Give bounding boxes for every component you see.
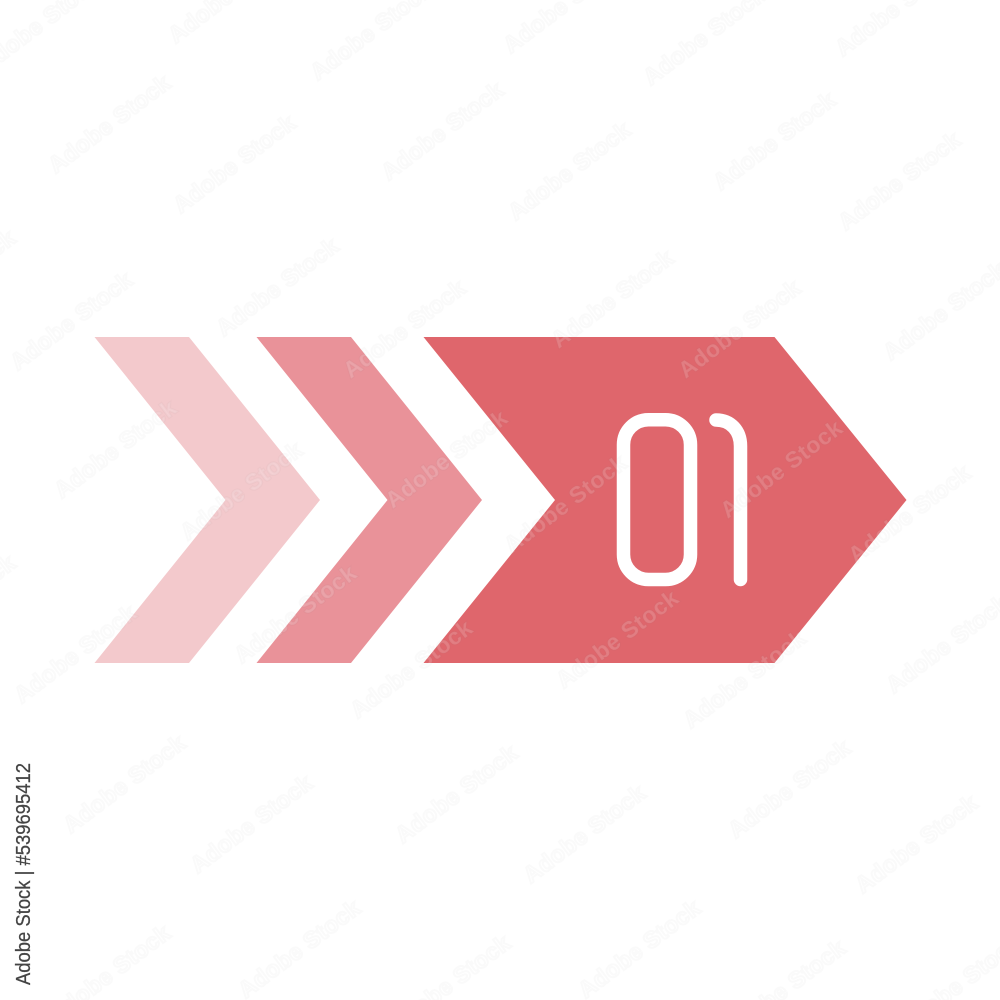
medium chevron [256,337,482,663]
watermark pattern: Adobe Stock [376,76,508,185]
watermark pattern: Adobe Stock [850,789,982,898]
watermark pattern: Adobe Stock [380,404,512,513]
watermark pattern: Adobe Stock [546,244,678,353]
watermark pattern: Adobe Stock [9,599,141,708]
watermark pattern: Adobe Stock [58,729,190,838]
watermark pattern: Adobe Stock [723,734,855,843]
watermark pattern: Adobe Stock [833,126,965,235]
watermark pattern: Adobe Stock [185,769,317,878]
main arrow [424,337,906,663]
watermark pattern: Adobe Stock [5,266,137,375]
stock ID caption: Adobe Stock | #539695412 [13,763,35,985]
watermark pattern: Adobe Stock [390,739,522,848]
watermark pattern: Adobe Stock [233,894,365,1000]
watermark pattern: Adobe Stock [499,449,631,558]
watermark pattern: Adobe Stock [843,459,975,568]
watermark pattern: Adobe Stock [175,436,307,545]
watermark pattern: Adobe Stock [345,614,477,723]
watermark pattern: Adobe Stock [338,274,470,383]
chevron arrow graphic [94,337,906,663]
watermark pattern: Adobe Stock [211,232,343,341]
watermark pattern: Adobe Stock [503,116,635,225]
watermark pattern: Adobe Stock [708,86,840,195]
watermark pattern: Adobe Stock [715,414,847,523]
watermark pattern: Adobe Stock [573,894,705,1000]
digit 1 [716,420,740,580]
digit 0 [624,420,690,580]
watermark pattern: Adobe Stock [49,394,181,503]
watermark pattern: Adobe Stock [229,559,361,668]
watermark pattern: Adobe Stock [168,109,300,218]
light chevron [94,337,320,663]
watermark pattern: Adobe Stock [673,274,805,383]
watermark pattern: Adobe Stock [551,584,683,693]
number 01 [624,420,740,580]
watermark pattern: Adobe Stock [43,69,175,178]
watermark pattern: Adobe Stock [678,624,810,733]
watermark pattern: Adobe Stock [518,779,650,888]
